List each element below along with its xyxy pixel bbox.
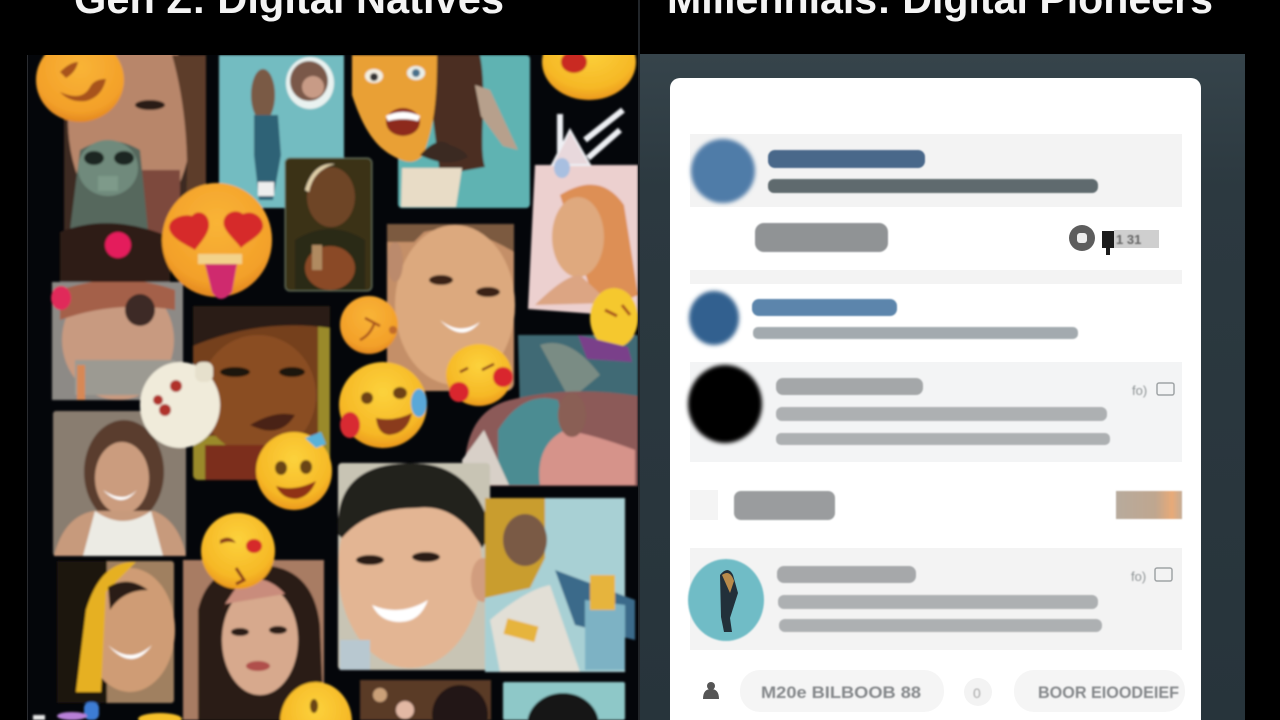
photo: smiling boy bbox=[338, 463, 495, 670]
emoji: tearful smile bbox=[339, 362, 427, 448]
sticker: white bag bbox=[552, 110, 623, 178]
emoji: small peach face bbox=[340, 296, 398, 354]
photo: dark tile with portrait bbox=[285, 158, 372, 291]
emoji: upper right kissy sticker bbox=[578, 288, 638, 362]
bottom buttons: 0 bbox=[973, 685, 981, 701]
photo: floral tile bottom bbox=[360, 680, 491, 720]
action row 1: 1 31 bbox=[1116, 232, 1141, 247]
post 3 bbox=[688, 362, 1182, 462]
emoji: top-right tongue bbox=[540, 55, 638, 102]
photo: man close-up bbox=[193, 306, 330, 480]
sticker: bottom-left balloon and emoji bbox=[33, 702, 182, 720]
photo: right group cutouts bbox=[460, 335, 638, 486]
emoji: heart eyes with tongue bbox=[162, 183, 272, 299]
divider band bbox=[690, 270, 1182, 284]
bottom buttons: M20e BILBOOB 88 bbox=[761, 683, 921, 702]
photo: top-left woman bbox=[62, 55, 208, 235]
post 4: fo) bbox=[1131, 569, 1146, 584]
post 4 bbox=[688, 548, 1182, 650]
sticker: alien statue with hat bbox=[60, 140, 170, 282]
emoji: winking kiss bbox=[201, 513, 275, 589]
bottom buttons: BOOR EIOODEIEF bbox=[1038, 683, 1179, 702]
photo: woman with yellow scarf bbox=[485, 498, 635, 672]
photo: smiling girl bbox=[387, 224, 515, 391]
photo: pink woman bbox=[528, 165, 638, 317]
post 1 bbox=[690, 134, 1182, 207]
emoji: blowing kiss with red bbox=[446, 344, 513, 406]
post 2 bbox=[689, 291, 1078, 345]
bottom buttons bbox=[703, 670, 1185, 712]
photo: woman in white top bbox=[53, 411, 186, 556]
photo: teal tile bottom bbox=[503, 682, 625, 720]
card: social feed bbox=[670, 78, 1201, 720]
post 3: fo) bbox=[1132, 383, 1147, 398]
emoji: open smile bbox=[256, 432, 332, 510]
photo: elf portrait bbox=[51, 280, 183, 400]
photo: cartoon girl on teal bbox=[352, 55, 530, 208]
panel: Gen Z emoji and selfie collage bbox=[28, 15, 638, 720]
photo: woman with yellow hair streak bbox=[57, 561, 175, 703]
photo: woman with dark hair bbox=[183, 560, 324, 720]
photo: teal tile with figure bbox=[219, 55, 344, 208]
action row 1 bbox=[755, 223, 1159, 255]
emoji: bottom centre bbox=[280, 682, 352, 720]
emoji: white blob with red dots bbox=[140, 362, 220, 448]
action row 2 bbox=[690, 490, 1182, 520]
emoji: orange top-left bbox=[34, 55, 125, 123]
panel: Millennials social feed background bbox=[640, 54, 1245, 720]
